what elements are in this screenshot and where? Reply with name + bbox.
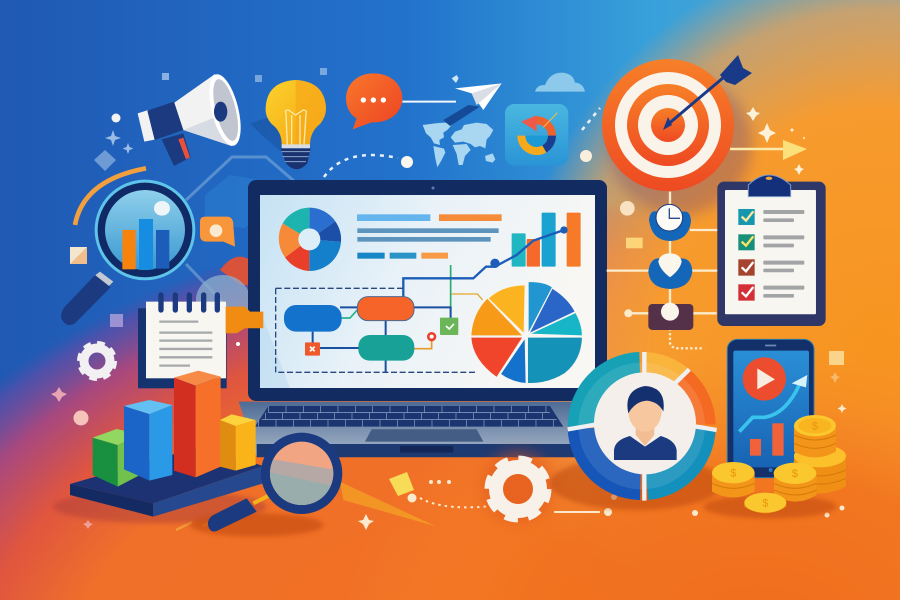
bottom gear	[483, 452, 553, 522]
notepad	[138, 295, 263, 388]
heart node	[648, 253, 692, 289]
yellow bar	[220, 414, 256, 471]
scattered background particles	[51, 68, 327, 530]
phone with video and growth chart	[727, 339, 814, 478]
sparkles top right	[746, 107, 805, 175]
box node	[648, 303, 693, 330]
tall coin stack	[794, 415, 836, 457]
app icon	[505, 104, 568, 166]
checklist item 4	[738, 284, 804, 301]
clipboard	[717, 175, 826, 326]
right pointing arrow	[730, 140, 807, 160]
clock node	[649, 204, 691, 241]
gold coin stacks: $	[812, 420, 819, 432]
checklist item 2	[738, 234, 804, 250]
arrow in target	[663, 55, 752, 130]
right coin stack	[794, 445, 846, 493]
chat bubble	[346, 73, 402, 129]
cloud	[535, 73, 585, 92]
light bulb	[250, 80, 326, 169]
left gear	[80, 344, 114, 378]
gold coin stacks: $	[792, 468, 799, 480]
gold coin stacks	[703, 415, 846, 518]
laptop lid	[248, 180, 607, 401]
3D bar chart on platform	[53, 371, 267, 523]
large magnifying glass with bars	[61, 168, 195, 325]
flowchart	[276, 288, 483, 372]
left coin stack	[712, 462, 755, 497]
megaphone	[138, 71, 247, 166]
small magnifying glass	[190, 433, 437, 537]
single coin	[744, 493, 786, 513]
donut chart	[279, 208, 341, 271]
checklist item 1	[738, 209, 804, 225]
target	[602, 55, 752, 215]
laptop	[239, 180, 607, 457]
checklist item 3	[738, 259, 804, 276]
user profile ring	[550, 352, 723, 510]
blue bar	[124, 400, 172, 481]
red bar	[174, 371, 221, 477]
connector line and paper plane	[402, 75, 502, 126]
process flow nodes	[607, 192, 725, 348]
laptop base	[239, 402, 587, 457]
bottom dots and sparkles	[358, 351, 846, 530]
node dots	[401, 150, 592, 168]
gold coin stacks: $	[762, 497, 768, 509]
green bar	[93, 429, 140, 487]
world map	[423, 123, 495, 167]
gold coin stacks: $	[730, 467, 737, 479]
screen bar chart with trend line	[403, 213, 581, 320]
dotted paths	[324, 108, 600, 177]
pie chart	[471, 282, 582, 383]
screen dashboard	[276, 208, 582, 383]
dashboard text bars	[357, 214, 502, 259]
laptop screen	[260, 195, 595, 388]
hexagon connector lines	[186, 157, 294, 312]
person avatar	[614, 386, 677, 460]
background map-like shape behind laptop	[196, 175, 275, 325]
small orange speech bubble	[200, 217, 235, 247]
middle coin stack	[774, 463, 817, 502]
